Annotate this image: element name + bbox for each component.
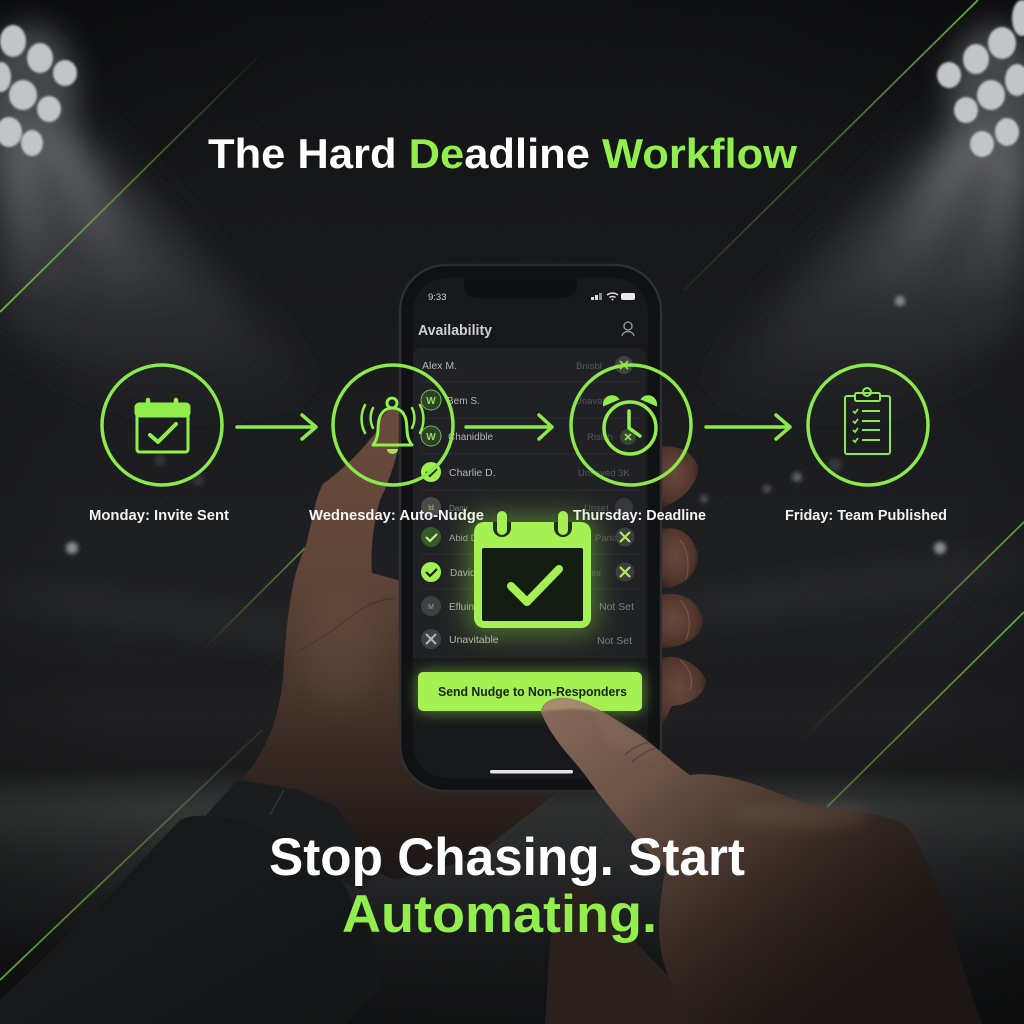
floodlight left — [0, 24, 78, 156]
step 4: Friday — [785, 365, 947, 524]
status badges: ld — [428, 505, 434, 512]
row names — [422, 360, 499, 646]
label: Thursday: Deadline — [573, 508, 706, 524]
row names: Efluin — [449, 602, 474, 613]
closing headline: Stop Chasing. Start — [269, 828, 745, 887]
step 2: Wednesday — [309, 365, 484, 524]
icon: alarm clock — [604, 396, 656, 454]
home indicator — [490, 770, 573, 774]
title: The Hard Deadline Workflow — [208, 130, 797, 177]
row names: Bem S. — [447, 396, 480, 407]
row names: Chanidble — [448, 432, 493, 443]
row statuses: Pariix — [577, 568, 601, 579]
spotlight beams right — [700, 130, 1024, 430]
step 3: Thursday — [571, 365, 706, 524]
step 1: Monday — [89, 365, 229, 524]
watch strap — [206, 780, 380, 890]
row statuses: Not Set — [599, 601, 634, 613]
availability list card — [413, 348, 646, 658]
label: Monday: Invite Sent — [89, 508, 229, 524]
sleeve — [0, 816, 380, 1024]
send nudge button: Send Nudge to Non-Responders — [438, 685, 627, 699]
row names: Charlie D. — [449, 467, 496, 479]
arrow 2 — [466, 415, 552, 439]
floodlight right — [937, 0, 1024, 157]
row names: Dany — [449, 504, 468, 513]
left hand holding phone — [243, 408, 560, 880]
row statuses: Unavail — [575, 396, 607, 407]
row names: David — [450, 568, 476, 579]
row statuses — [575, 361, 634, 647]
row names: Abid D — [449, 533, 478, 544]
status badges: W — [426, 396, 436, 407]
row names: Unavitable — [449, 634, 499, 646]
label: Friday: Team Published — [785, 508, 947, 524]
label: Wednesday: Auto-Nudge — [309, 508, 484, 524]
arrow 3 — [706, 415, 790, 439]
row statuses: Rislsh — [587, 432, 613, 443]
thumb — [545, 885, 690, 1024]
icon: clipboard checklist — [845, 388, 890, 454]
status bar — [428, 292, 635, 303]
row statuses: Bnisbl — [576, 361, 602, 372]
icon: bell — [362, 398, 423, 454]
closing headline — [269, 828, 745, 944]
phone screen — [413, 278, 648, 778]
row statuses: Unset — [584, 503, 609, 514]
large glowing calendar — [468, 511, 596, 634]
screen heading: Availability — [418, 323, 492, 339]
row names: Alex M. — [422, 360, 457, 372]
bokeh lights — [66, 296, 946, 554]
sleeve and watch strap — [0, 780, 380, 1024]
pointing hand — [541, 698, 982, 1024]
fingers behind phone edge — [650, 446, 706, 726]
phone body — [400, 265, 661, 791]
status badges: M — [428, 604, 434, 611]
status badges — [421, 356, 636, 649]
workflow timeline — [89, 365, 947, 524]
send nudge button — [418, 672, 643, 712]
phone — [400, 265, 661, 791]
profile icon — [622, 322, 634, 336]
row statuses: Not Set — [597, 635, 632, 647]
spotlight beams left — [0, 130, 320, 430]
status badges: W — [426, 432, 436, 443]
arrow 1 — [237, 415, 316, 439]
status bar: 9:33 — [428, 292, 446, 303]
icon: calendar check — [136, 400, 189, 452]
closing headline: Automating. — [342, 885, 657, 944]
row statuses: Unsaved 3K — [578, 468, 630, 479]
row statuses: Pariix — [595, 533, 619, 544]
notch — [464, 278, 577, 298]
